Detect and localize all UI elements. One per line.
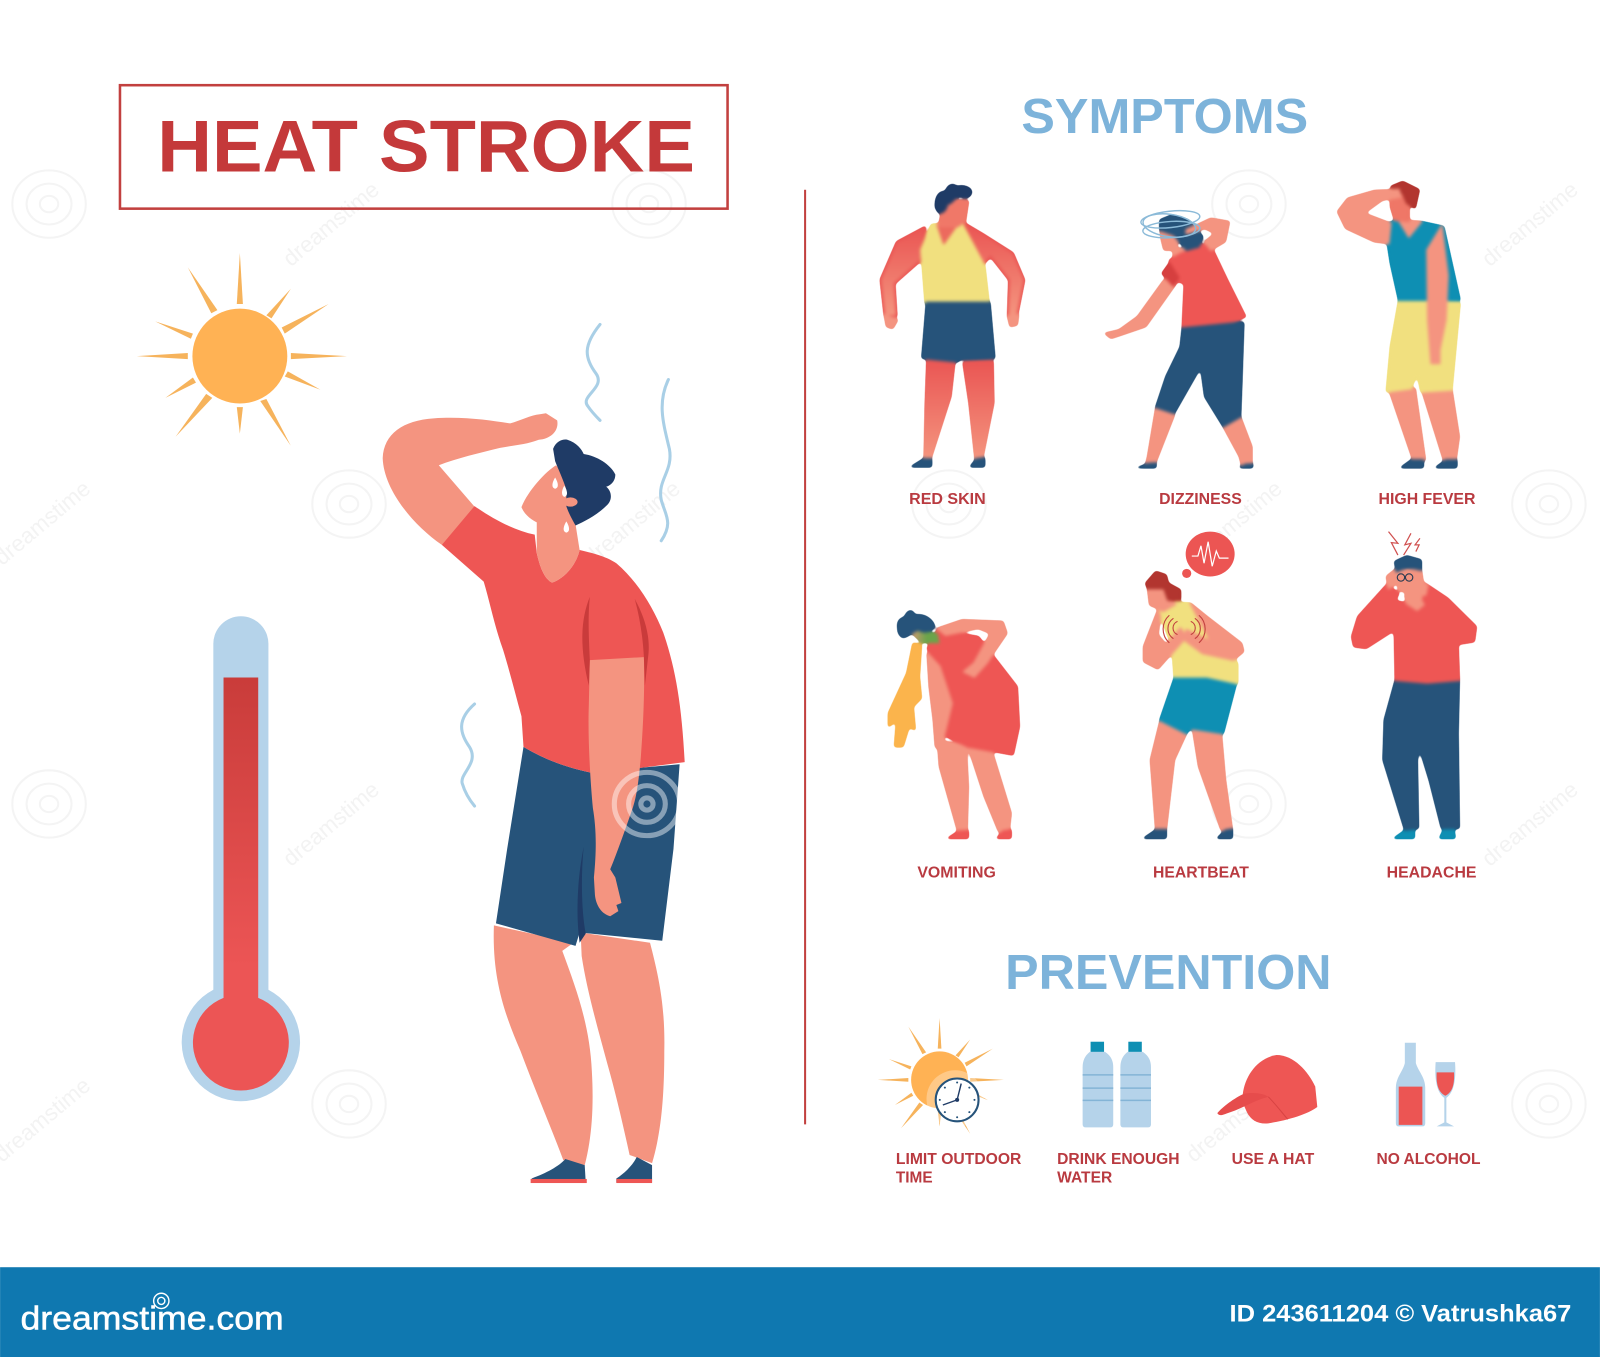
watermark pattern: dreamstime: [579, 476, 685, 570]
label line two: WATER: [1057, 1170, 1112, 1187]
neck and face: [521, 465, 580, 583]
heading: prevention: PREVENTION: [1005, 946, 1332, 1000]
sweat drops: [552, 478, 569, 533]
glasses: [1397, 574, 1413, 581]
watermark swirl on shorts: [614, 772, 680, 836]
body: [1105, 215, 1253, 468]
hanging arm: [589, 657, 644, 916]
shoes: [531, 1157, 652, 1183]
dizzy rings: [1140, 208, 1201, 240]
label line two: TIME: [896, 1170, 933, 1187]
watermark pattern: dreamstime: [1477, 777, 1583, 871]
shorts: [496, 747, 680, 946]
label: DRINK ENOUGH: [1057, 1151, 1180, 1168]
raised arm: [383, 413, 557, 545]
body: [1144, 572, 1244, 838]
figure: dizziness: [1105, 208, 1253, 468]
left leg: [494, 925, 593, 1165]
shirt: [442, 506, 685, 772]
label: HEARTBEAT: [1153, 864, 1250, 881]
footer bar: [0, 1267, 1600, 1357]
image credit: ID 243611204 © Vatrushka67: [1230, 1300, 1571, 1327]
watermark pattern: dreamstime: [278, 177, 384, 271]
divider: [804, 190, 806, 1124]
label: VOMITING: [917, 864, 996, 881]
thought bubble with pulse: [1182, 532, 1235, 578]
label: HIGH FEVER: [1379, 491, 1475, 508]
label: DIZZINESS: [1159, 491, 1242, 508]
pain bolts: [1389, 532, 1420, 555]
icon: sun with clock: [878, 1018, 1004, 1134]
title: [120, 85, 728, 209]
figure: red skin: [880, 184, 1024, 467]
right leg: [581, 933, 664, 1163]
label: HEADACHE: [1387, 864, 1476, 881]
heading: symptoms: SYMPTOMS: [1021, 90, 1308, 144]
watermark pattern: [0, 170, 1586, 1167]
label: USE A HAT: [1232, 1151, 1315, 1168]
label: LIMIT OUTDOOR: [896, 1151, 1021, 1168]
icon: cap: [1217, 1055, 1317, 1124]
figure: heartbeat: [1144, 532, 1244, 838]
ear: [563, 497, 578, 507]
hair: [553, 440, 615, 525]
watermark pattern: dreamstime: [1477, 177, 1583, 271]
main figure: man shielding eyes: [383, 413, 685, 1183]
watermark pattern: dreamstime: [1181, 1072, 1287, 1167]
watermark pattern: dreamstime: [278, 777, 384, 871]
label: NO ALCOHOL: [1376, 1151, 1481, 1168]
figure: headache: [1352, 532, 1476, 838]
chest pulse rings: [1163, 615, 1205, 643]
figure: high fever: [1337, 182, 1460, 468]
watermark pattern: dreamstime: [1181, 476, 1287, 570]
icon: water bottles: [1083, 1042, 1151, 1127]
icon: wine bottle and glass: [1396, 1043, 1455, 1126]
shirt creases: [582, 597, 649, 686]
vomit: [889, 643, 921, 747]
body: [1352, 556, 1476, 838]
logo: dreamstime.com: [20, 1300, 284, 1337]
figure: vomiting: [889, 610, 1019, 838]
heat waves: [462, 324, 670, 806]
thermometer: [182, 616, 300, 1101]
title: HEAT STROKE: [157, 104, 695, 187]
label: RED SKIN: [909, 491, 986, 508]
icon: sun: [137, 253, 347, 446]
